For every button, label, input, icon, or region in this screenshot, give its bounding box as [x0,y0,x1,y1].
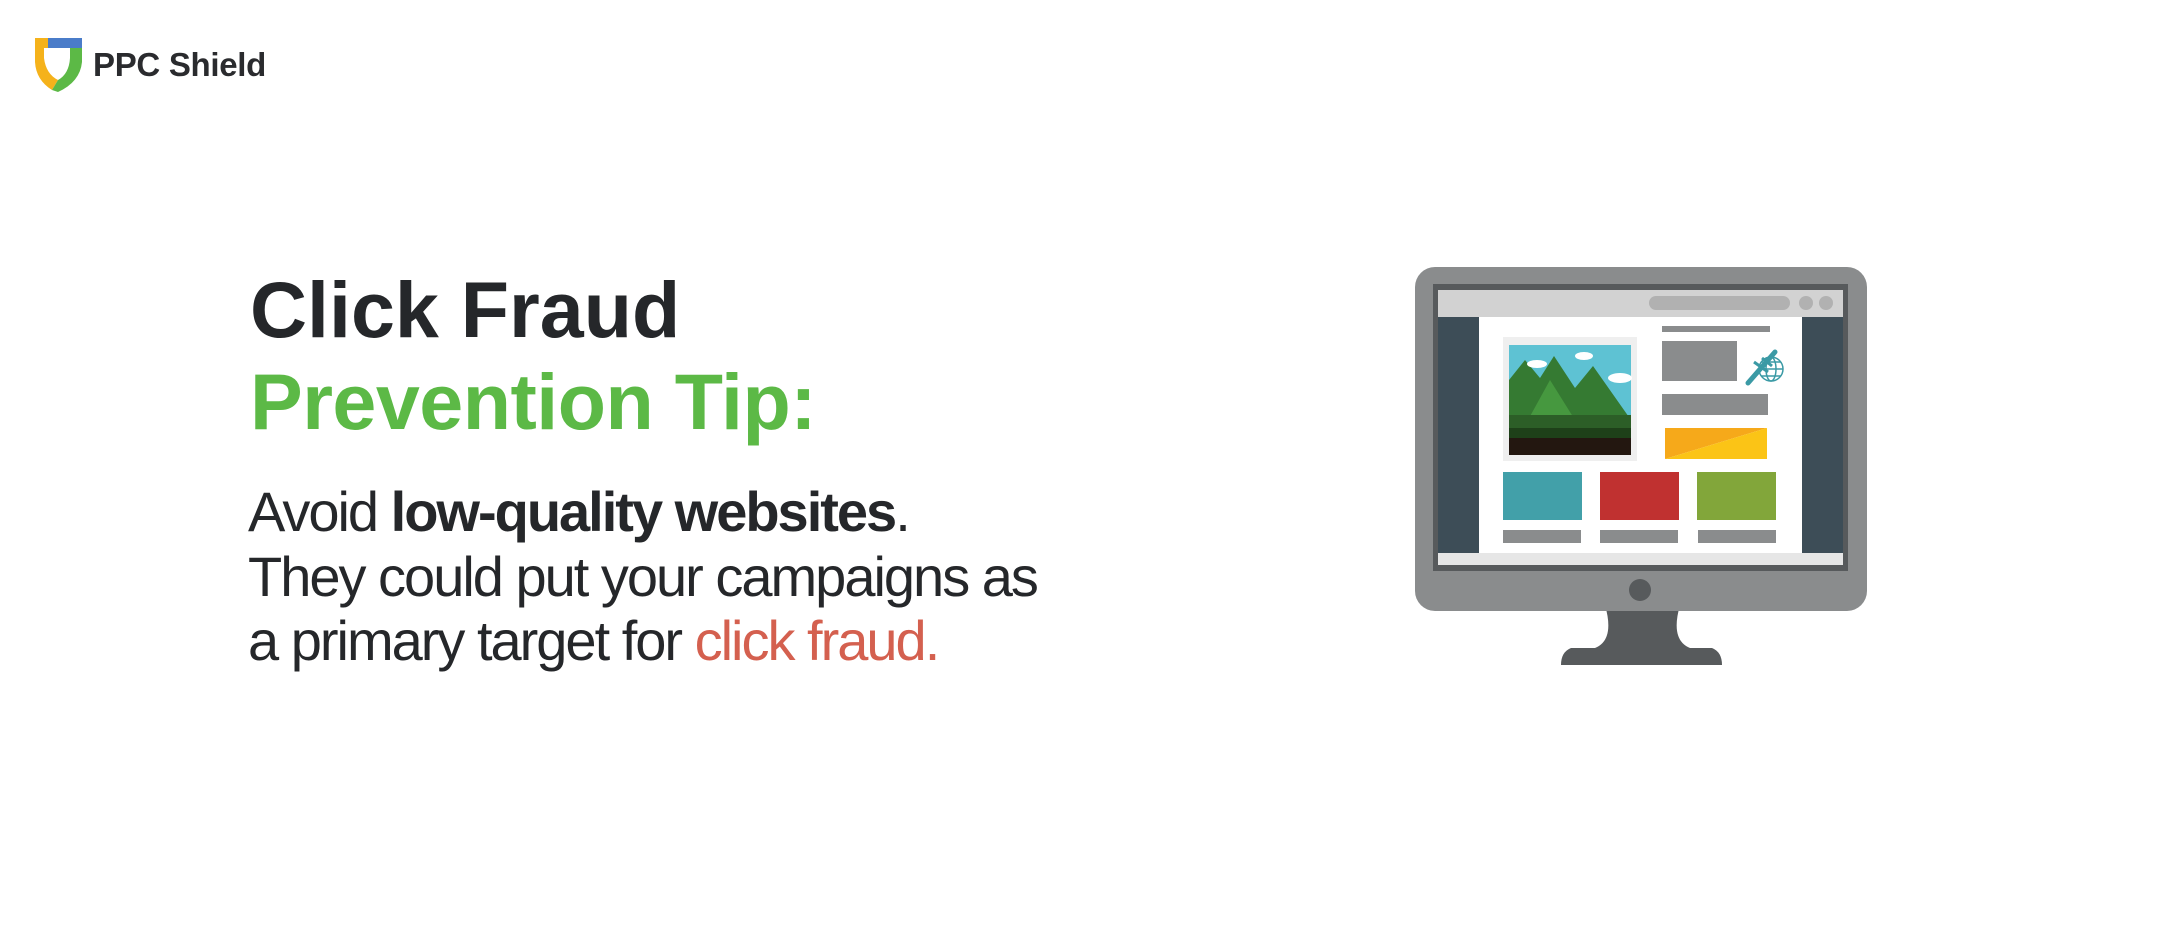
browser window [1438,290,1843,565]
body text: Avoid low-quality websites. [248,480,909,543]
title line 2: Prevention Tip: [250,357,816,446]
logo [35,38,266,92]
body text: They could put your campaigns as [248,544,1037,608]
body text: a primary target for click fraud. [248,609,938,672]
stand [1561,605,1722,665]
title [250,265,816,446]
icon: shield [35,38,82,92]
icon: plane globe [1748,352,1783,383]
yellow banner [1665,428,1767,459]
text blocks [1662,326,1770,332]
brand name: PPC Shield [93,46,266,83]
title line 1: Click Fraud [250,265,680,354]
body text [248,480,1037,672]
power button [1629,579,1651,601]
bezel [1415,267,1867,611]
tiles [1503,472,1582,520]
picture [1503,337,1637,461]
